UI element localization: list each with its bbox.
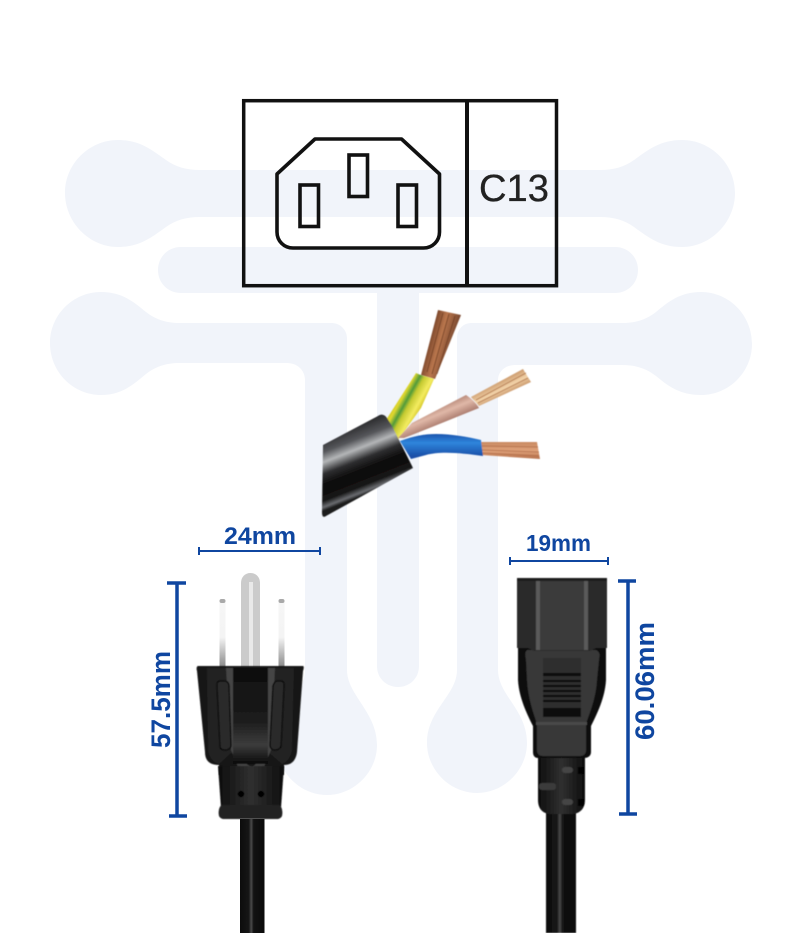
plug body xyxy=(197,666,304,775)
dimension line xyxy=(510,557,608,565)
wire: brown live xyxy=(398,395,479,438)
dimension line xyxy=(199,547,320,555)
C13 connector xyxy=(517,578,607,933)
panel outline with divider xyxy=(244,100,556,286)
connector lower body xyxy=(518,646,606,758)
value label: 60.06mm xyxy=(630,622,660,740)
US three-prong plug xyxy=(197,573,304,933)
C13 symbol panel xyxy=(244,100,556,286)
background circuit watermark xyxy=(50,140,752,795)
strain relief xyxy=(538,755,585,814)
cable sheath xyxy=(322,415,413,517)
dimension line xyxy=(618,581,637,814)
dimension: connector width 19mm xyxy=(510,530,608,565)
grip recess: left xyxy=(217,681,231,750)
icon: C13 socket outline xyxy=(277,139,440,248)
value label: 24mm xyxy=(224,523,296,550)
dimension: connector height 60.06mm xyxy=(618,581,660,814)
watermark: centre T-shape xyxy=(158,247,638,687)
wire: yellow-green earth xyxy=(386,373,434,440)
dimension: plug height 57.5mm xyxy=(146,583,187,816)
value label: 19mm xyxy=(526,530,591,556)
grip recess: right xyxy=(270,681,284,750)
icon: socket pin slots xyxy=(300,155,416,226)
plug cord xyxy=(240,819,264,933)
watermark: right branch xyxy=(427,292,752,793)
latch with ridges xyxy=(543,658,581,717)
label: C13: C13 xyxy=(479,168,549,210)
copper strands: neutral xyxy=(481,442,540,459)
wire: blue neutral xyxy=(400,434,483,459)
dimension: plug width 24mm xyxy=(199,523,320,555)
connector upper shell xyxy=(517,578,607,651)
watermark: left branch xyxy=(50,292,377,795)
watermark: top bar xyxy=(65,140,735,247)
dimension line xyxy=(167,583,187,816)
prong: ground pin xyxy=(241,573,260,667)
copper strands: earth xyxy=(421,310,461,379)
connector cord xyxy=(546,808,576,933)
illustration: stripped three-core cable xyxy=(322,310,540,517)
prong: right blade xyxy=(278,599,284,667)
plug collar xyxy=(218,766,284,819)
prong: left blade xyxy=(220,599,226,667)
copper strands: live xyxy=(471,369,531,406)
value label: 57.5mm xyxy=(146,651,176,748)
